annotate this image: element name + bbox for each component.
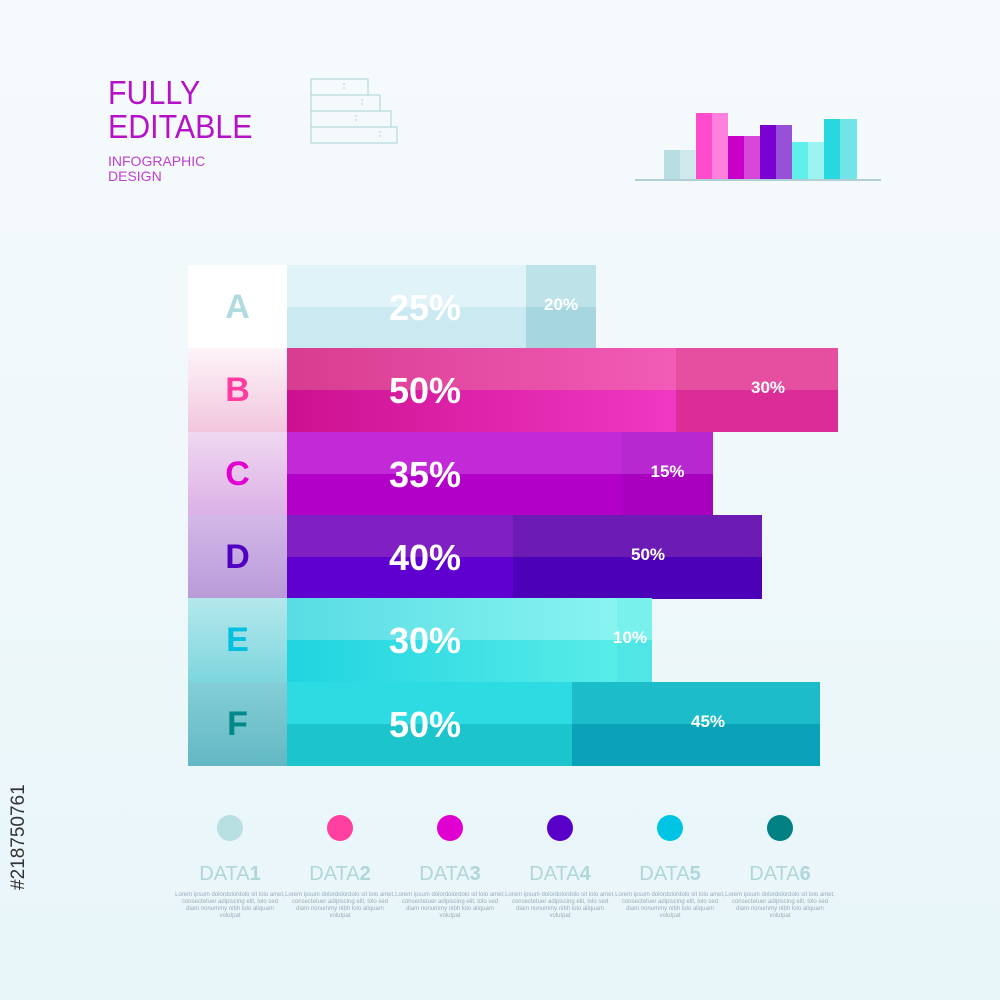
title: FULLY xyxy=(108,74,200,111)
legend item 4 xyxy=(505,815,615,919)
row A xyxy=(188,265,596,348)
bar chart: 50% xyxy=(631,545,665,564)
icon: stacked bars outline xyxy=(310,78,398,144)
row E xyxy=(188,598,652,682)
legend item 5: DATA5 xyxy=(639,863,701,885)
legend item 3: Lorem ipsum dolordolordolo sit lolo amet, consectetuer adipiscing elit, lolo sed diam nonummy nibh lolo aliquam volutpat xyxy=(395,892,505,919)
legend item 6: Lorem ipsum dolordolordolo sit lolo amet, consectetuer adipiscing elit, lolo sed diam nonummy nibh lolo aliquam volutpat xyxy=(725,892,835,919)
legend item 4: DATA4 xyxy=(529,863,591,885)
legend item 1: DATA1 xyxy=(199,863,261,885)
legend item 3: DATA3 xyxy=(419,863,481,885)
title xyxy=(108,74,253,145)
bar chart: 15% xyxy=(650,462,685,481)
bar chart: 20% xyxy=(544,295,578,314)
bar chart: 30% xyxy=(389,620,461,661)
icon: mini bar chart xyxy=(635,113,881,181)
legend item 5: Lorem ipsum dolordolordolo sit lolo amet, consectetuer adipiscing elit, lolo sed diam nonummy nibh lolo aliquam volutpat xyxy=(615,892,725,919)
row D xyxy=(188,515,762,599)
legend item 5 xyxy=(615,815,725,919)
row B xyxy=(188,348,838,432)
legend item 2: DATA2 xyxy=(309,863,371,885)
legend item 6: DATA6 xyxy=(749,863,811,885)
bar chart: D xyxy=(225,538,250,576)
bar chart: C xyxy=(225,454,250,492)
bar chart: A xyxy=(225,288,250,326)
legend item 6 xyxy=(725,815,835,919)
bar chart: 45% xyxy=(691,712,725,731)
bar chart: 30% xyxy=(751,378,785,397)
subtitle: INFOGRAPHIC xyxy=(108,153,205,169)
bar chart: 50% xyxy=(389,370,461,411)
bar chart: 35% xyxy=(389,454,461,495)
bar chart: F xyxy=(227,704,248,742)
bar chart: 25% xyxy=(389,287,461,328)
legend item 4: Lorem ipsum dolordolordolo sit lolo amet, consectetuer adipiscing elit, lolo sed diam nonummy nibh lolo aliquam volutpat xyxy=(505,892,615,919)
legend item 1: Lorem ipsum dolordolordolo sit lolo amet, consectetuer adipiscing elit, lolo sed diam nonummy nibh lolo aliquam volutpat xyxy=(175,892,285,919)
bar chart: B xyxy=(225,370,250,408)
bar chart: E xyxy=(226,620,249,658)
legend item 3 xyxy=(395,815,505,919)
bar chart xyxy=(188,265,838,766)
bar chart: 50% xyxy=(389,704,461,745)
legend item 1 xyxy=(175,815,285,919)
bar chart: 10% xyxy=(613,628,647,647)
legend item 2: Lorem ipsum dolordolordolo sit lolo amet, consectetuer adipiscing elit, lolo sed diam nonummy nibh lolo aliquam volutpat xyxy=(285,892,395,919)
bar chart: 40% xyxy=(389,537,461,578)
title: EDITABLE xyxy=(108,108,253,145)
subtitle xyxy=(108,153,205,184)
subtitle: DESIGN xyxy=(108,168,162,184)
row F xyxy=(188,682,820,766)
row C xyxy=(188,432,713,515)
side id text: #218750761 xyxy=(8,784,29,890)
legend item 2 xyxy=(285,815,395,919)
